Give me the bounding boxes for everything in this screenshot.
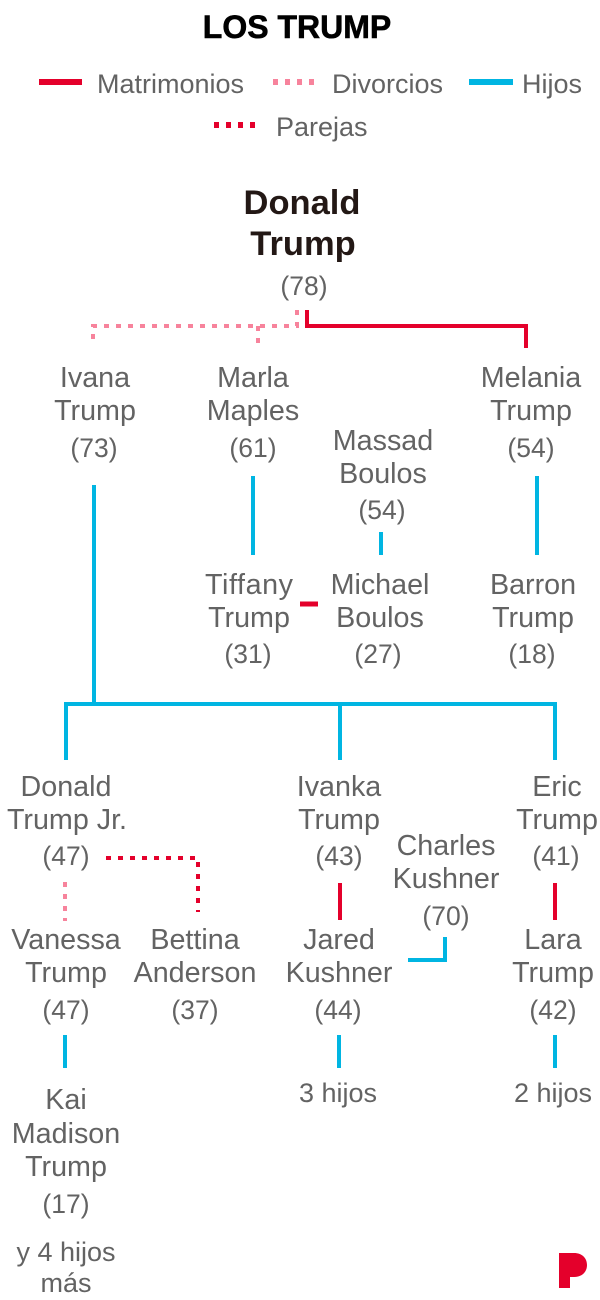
person: Donald Trump Jr.: (47) [42,841,90,871]
person: Kai Madison Trump: Kai [45,1084,87,1116]
person: Jared Kushner: Jared [303,924,375,956]
person: Donald Trump: Donald [244,184,360,222]
person: Donald Trump: Trump [250,225,356,263]
person: Melania Trump: Trump [490,395,572,427]
marriage line: Eric and Lara [553,883,557,920]
divorce line: Donald Jr. to Vanessa [63,882,67,921]
person: Vanessa Trump [11,924,121,1025]
child line: Charles to Jared [408,937,445,960]
person: Tiffany Trump: (31) [224,639,272,669]
person: Tiffany Trump: Tiffany [205,569,294,601]
person: Bettina Anderson: Anderson [134,957,256,989]
person: Marla Maples: Maples [207,395,299,427]
person: Kai Madison Trump: (17) [42,1189,90,1219]
person: Melania Trump: Melania [481,362,581,394]
person: Massad Boulos: Massad [333,425,433,457]
text: 3 hijos: 3 hijos [299,1078,377,1108]
person: Bettina Anderson: (37) [171,995,219,1025]
person: Massad Boulos: (54) [358,495,406,525]
person: Marla Maples [207,362,299,463]
person: Charles Kushner: Kushner [393,863,500,895]
person: Melania Trump [481,362,581,463]
person: Ivanka Trump [297,771,381,871]
text: y 4 hijos más: más [40,1268,92,1298]
person: Lara Trump: (42) [529,995,577,1025]
legend: matrimonios: Matrimonios [97,69,244,99]
person: Jared Kushner [286,924,393,1025]
person: Barron Trump: Trump [492,602,574,634]
person: Barron Trump: (18) [508,639,556,669]
person: Bettina Anderson [134,924,256,1025]
legend: divorcios: Divorcios [332,69,443,99]
legend [39,69,582,142]
person: Jared Kushner: (44) [314,995,362,1025]
person: Ivana Trump: Trump [54,395,136,427]
legend: hijos: Hijos [522,69,582,99]
person: Barron Trump: Barron [490,569,576,601]
person: Ivana Trump: (73) [70,433,118,463]
person: Charles Kushner [393,830,500,931]
person: Bettina Anderson: Bettina [150,924,240,956]
person: Charles Kushner: (70) [422,901,470,931]
person: Donald Trump [244,184,360,301]
partner line: Donald Jr. to Bettina [106,858,198,912]
person: Donald Trump: (78) [280,271,328,301]
text: 2 hijos: 2 hijos [514,1078,592,1108]
person: Kai Madison Trump [12,1084,120,1219]
person: Charles Kushner: Charles [397,830,495,862]
person: Kai Madison Trump: Madison [12,1118,120,1150]
child line: Marla to Tiffany [251,476,255,555]
title: LOS TRUMP [203,9,391,45]
person: Michael Boulos: (27) [354,639,402,669]
child line: Melania to Barron [535,476,539,555]
person: Michael Boulos [331,569,429,669]
person: Massad Boulos: Boulos [339,458,427,490]
child lines: Ivana to her children [66,485,555,760]
person: Donald Trump Jr. [7,771,127,871]
icon: publisher logo [559,1253,587,1288]
person: Lara Trump: Lara [524,924,582,956]
person: Eric Trump: (41) [532,841,580,871]
marriage line: Tiffany and Michael [300,602,318,606]
person: Eric Trump: Trump [516,804,598,836]
person: Lara Trump: Trump [512,957,594,989]
person: Marla Maples: (61) [229,433,277,463]
legend: parejas: Parejas [276,112,368,142]
person: Ivanka Trump: Trump [298,804,380,836]
person: Melania Trump: (54) [507,433,555,463]
text: y 4 hijos más: y 4 hijos [16,1237,116,1267]
person: Ivanka Trump: (43) [315,841,363,871]
person: Tiffany Trump: Trump [208,602,290,634]
child line: Lara to children [553,1035,557,1068]
person: Vanessa Trump: (47) [42,995,90,1025]
person: Michael Boulos: Boulos [336,602,424,634]
person: Jared Kushner: Kushner [286,957,393,989]
text: y 4 hijos más [16,1237,116,1298]
person: Tiffany Trump [205,569,294,669]
person: Marla Maples: Marla [217,362,289,394]
marriage line: Donald to Melania [307,310,526,348]
divorce lines: Donald to Ivana and Marla [93,310,297,346]
child line: Vanessa to Kai [63,1035,67,1068]
person: Donald Trump Jr.: Donald [21,771,111,803]
person: Eric Trump [516,771,598,871]
child line: Massad to Michael [379,532,383,555]
person: Lara Trump [512,924,594,1025]
person: Massad Boulos [333,425,433,525]
person: Ivana Trump: Ivana [60,362,130,394]
person: Eric Trump: Eric [532,771,582,803]
legend: hijos [469,69,582,99]
person: Donald Trump Jr.: Trump Jr. [7,804,127,836]
person: Kai Madison Trump: Trump [25,1151,107,1183]
person: Barron Trump [490,569,576,669]
person: Vanessa Trump: Vanessa [11,924,121,956]
person: Ivana Trump [54,362,136,463]
person: Michael Boulos: Michael [331,569,429,601]
marriage line: Ivanka and Jared [338,883,342,920]
child line: Jared to children [337,1035,341,1068]
person: Ivanka Trump: Ivanka [297,771,381,803]
person: Vanessa Trump: Trump [25,957,107,989]
